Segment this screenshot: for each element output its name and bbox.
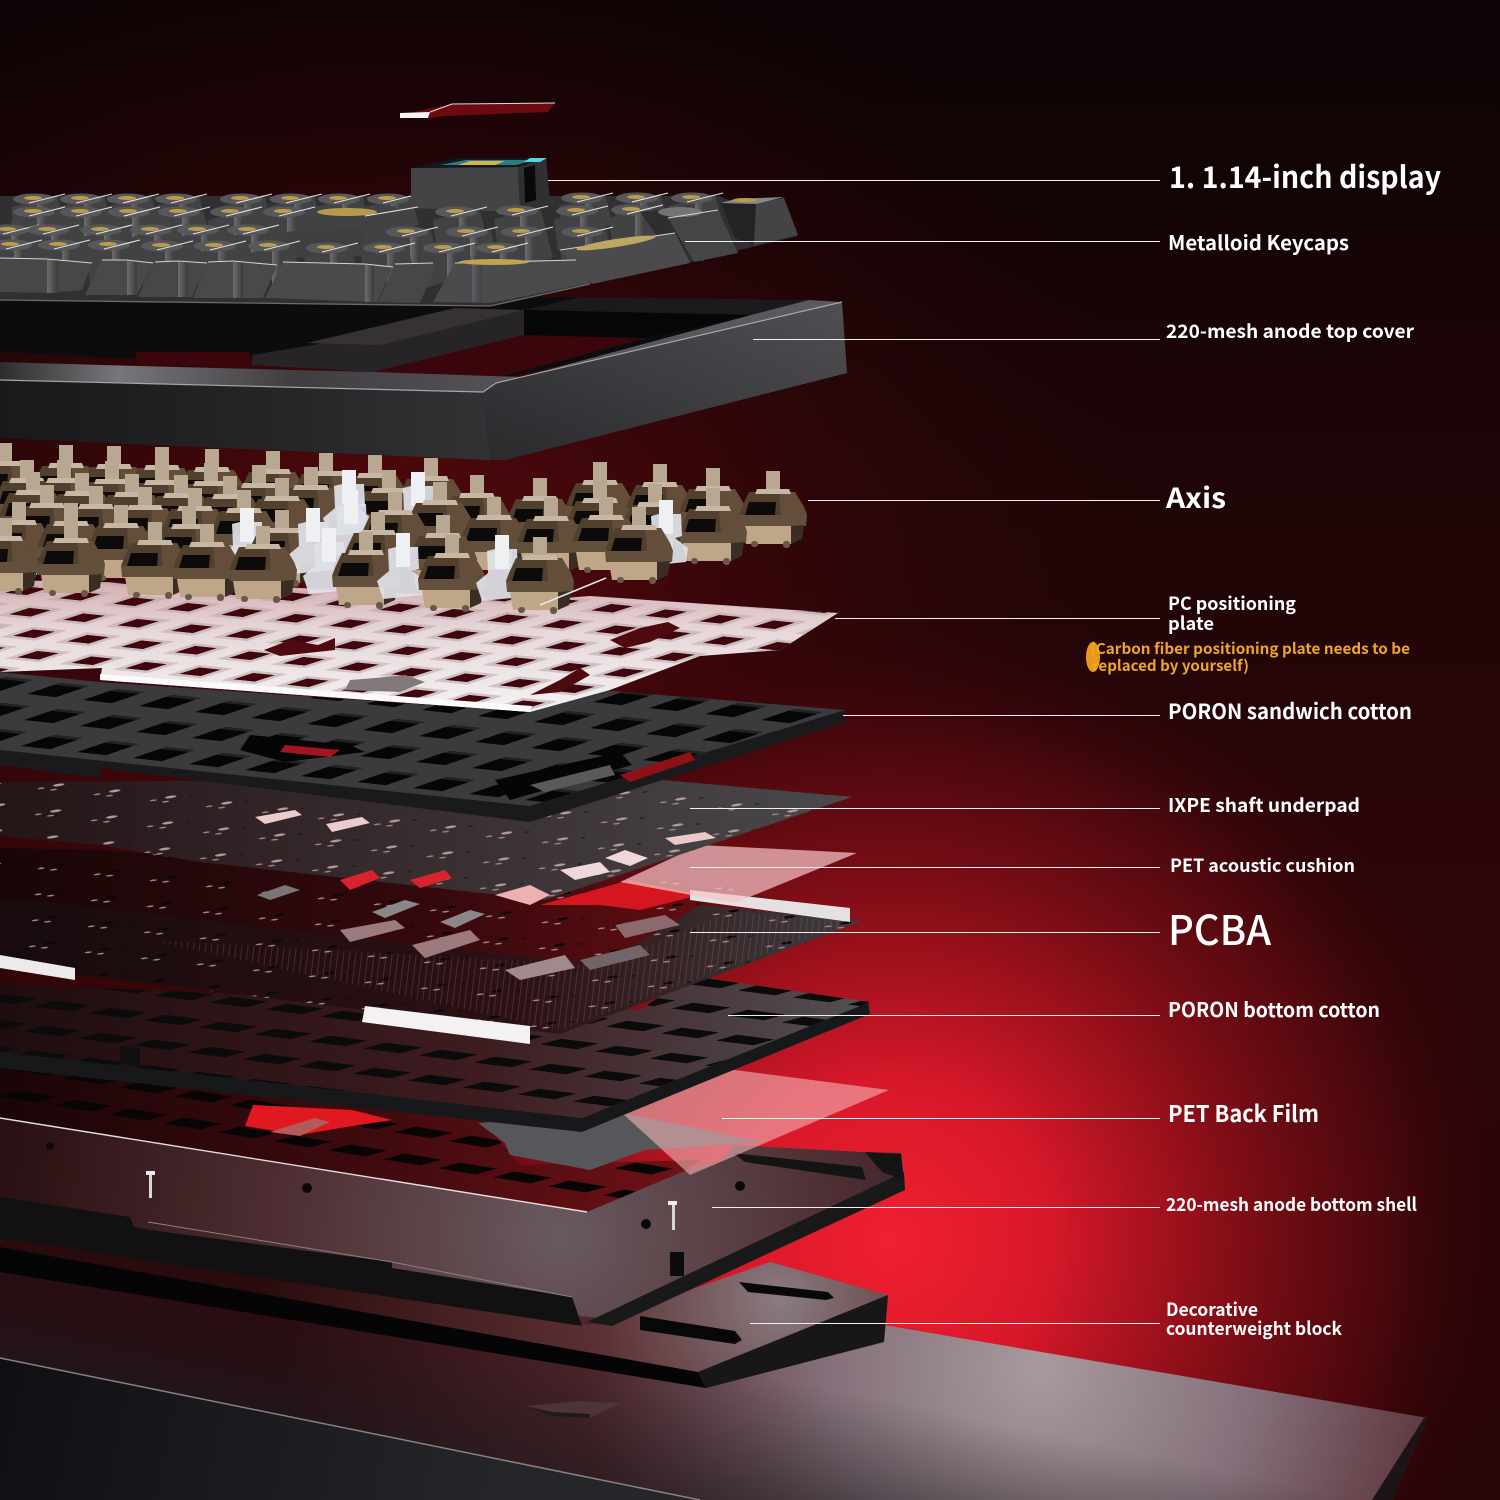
label: PC positioning plate: PC positioning — [1168, 590, 1296, 616]
label: IXPE shaft underpad: IXPE shaft underpad — [1168, 791, 1360, 818]
PET back film — [622, 1069, 889, 1175]
PORON bottom cotton — [0, 976, 870, 1132]
top cover frame — [0, 297, 847, 460]
label: Axis: Axis — [1165, 477, 1226, 517]
label: PET acoustic cushion: PET acoustic cushion — [1170, 852, 1355, 878]
IXPE shaft underpad — [0, 778, 852, 905]
axis switches — [0, 443, 807, 614]
PORON sandwich cotton — [0, 672, 846, 822]
label: PORON sandwich cotton: PORON sandwich cotton — [1168, 696, 1412, 726]
display keycap — [411, 158, 550, 212]
small foot pad — [525, 1401, 621, 1418]
orange note — [1086, 638, 1410, 676]
PET acoustic cushion — [620, 845, 857, 903]
label: PC positioning plate: plate — [1168, 610, 1214, 636]
orange note: replaced by yourself) — [1092, 655, 1249, 676]
label: PCBA: PCBA — [1168, 897, 1271, 957]
table — [0, 1174, 1428, 1500]
orange note: (Carbon fiber positioning plate needs to be — [1090, 638, 1410, 659]
white support bars — [0, 890, 850, 1044]
label: counterweight block — [750, 1296, 1342, 1341]
counterweight block — [0, 1225, 888, 1388]
bottom shell — [0, 1050, 905, 1326]
PC positioning plate — [0, 580, 838, 712]
label: bottom shell: 220-mesh anode bottom shell — [1166, 1191, 1417, 1217]
PCBA — [0, 848, 862, 1044]
keycaps — [0, 158, 798, 306]
label: top cover: 220-mesh anode top cover — [1166, 317, 1415, 344]
label: counterweight block: counterweight block — [1166, 1315, 1342, 1341]
label: PC positioning plate — [835, 590, 1296, 636]
rightmost keycap — [721, 197, 798, 245]
floating display screen — [400, 103, 555, 118]
label: Metalloid Keycaps: Metalloid Keycaps — [1168, 227, 1349, 256]
label: PORON bottom cotton: PORON bottom cotton — [1168, 994, 1380, 1023]
label: counterweight block: Decorative — [1166, 1296, 1258, 1322]
front row keys — [0, 233, 690, 303]
label: 1.14-inch display: 1. 1.14-inch display — [1169, 153, 1441, 197]
label: PET Back Film: PET Back Film — [1168, 1095, 1319, 1129]
